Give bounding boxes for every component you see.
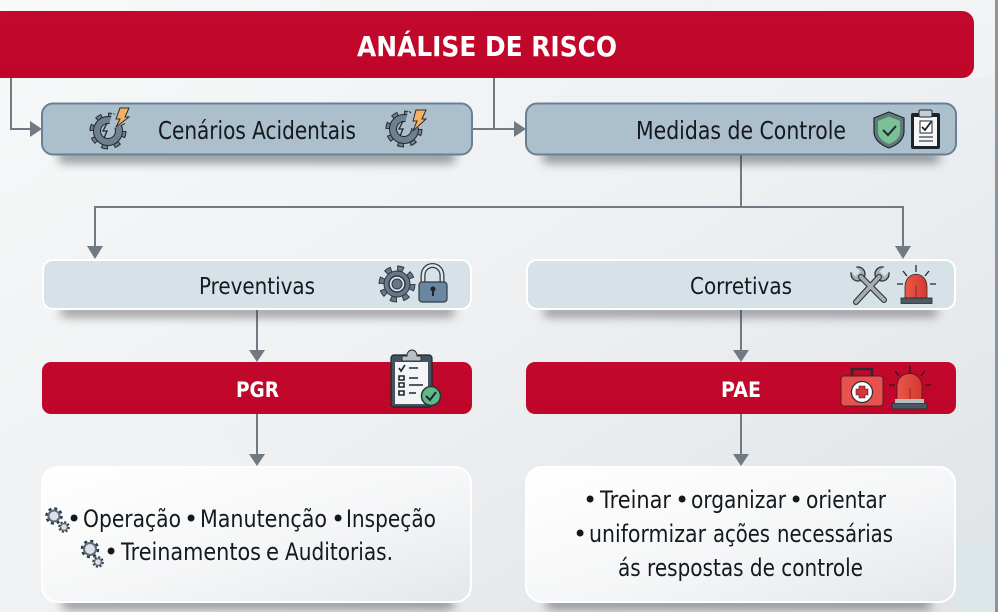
title banner	[0, 11, 974, 78]
icon: padlock	[419, 266, 447, 302]
text: PAE line one	[583, 486, 886, 514]
icon: broken gear with lightning	[92, 108, 129, 146]
title: ANÁLISE DE RISCO	[357, 29, 617, 63]
connector: PGR to list	[249, 414, 265, 466]
text: PGR line two	[104, 538, 393, 566]
panel: Corretivas: Corretivas	[690, 272, 792, 300]
text: PAE line two: necessárias	[777, 520, 893, 548]
panel: Cenários Acidentais: Cenários Acidentais	[158, 116, 356, 145]
panel: Preventivas	[43, 260, 471, 317]
text: PAE line one: orientar	[806, 486, 886, 514]
panel: PGR	[42, 350, 472, 414]
text: PAE line one: organizar	[691, 486, 786, 514]
text: PGR line one: Operação	[83, 505, 181, 533]
icon: gear	[382, 268, 412, 300]
connector: PAE to list	[733, 414, 749, 466]
text: PAE line two: •	[573, 520, 587, 548]
connector: Medidas de Controle to Preventivas and Corretivas	[87, 154, 911, 259]
panel: Medidas de Controle	[526, 104, 956, 163]
panel: Medidas de Controle: Medidas de Controle	[636, 116, 846, 145]
icon: shield with check	[874, 112, 904, 148]
icon: small gears	[47, 509, 68, 532]
connector: Corretivas to PAE	[733, 309, 749, 362]
connector: header to Cenários Acidentais	[11, 78, 42, 137]
icon: small gears	[82, 542, 102, 566]
text: PAE line two: ações	[713, 520, 770, 548]
text: PGR line two: e	[266, 538, 279, 566]
text: PAE line two: uniformizar	[589, 520, 706, 548]
text: PAE line one: •	[675, 486, 689, 514]
panel: PGR activities	[42, 467, 471, 609]
panel: Preventivas: Preventivas	[199, 272, 315, 300]
panel: Corretivas	[527, 260, 955, 317]
text: PAE line one: •	[789, 486, 803, 514]
text: PGR line one: •	[184, 505, 198, 533]
text: PGR line one: Manutenção	[200, 505, 327, 533]
icon: red siren	[897, 265, 936, 304]
panel: PAE: PAE	[721, 378, 761, 402]
text: PGR line one	[67, 505, 436, 533]
icon: red siren	[889, 366, 931, 409]
text: PAE line three: ás respostas de controle	[618, 554, 863, 582]
connector: Preventivas to PGR	[249, 309, 265, 362]
text: PGR line two: Auditorias.	[285, 538, 393, 566]
icon: crossed wrenches	[848, 264, 892, 302]
text: PGR line two: Treinamentos	[120, 538, 261, 566]
connector: header to Medidas de Controle	[472, 78, 526, 137]
icon: checklist clipboard	[391, 350, 440, 407]
panel: Cenários Acidentais	[42, 104, 472, 163]
text: PGR line one: •	[331, 505, 345, 533]
text: PGR line two: •	[104, 538, 118, 566]
text: PGR line one: •	[67, 505, 81, 533]
text: PGR line one: Inspeção	[346, 505, 436, 533]
text: PAE line one: Treinar	[599, 486, 671, 514]
text: PAE line two	[573, 520, 893, 548]
icon: broken gear with lightning	[388, 110, 426, 144]
icon: first aid kit	[841, 369, 883, 406]
panel: PGR: PGR	[236, 378, 279, 402]
text: PAE line one: •	[583, 486, 597, 514]
panel: PAE	[526, 362, 956, 414]
icon: clipboard with check	[911, 110, 940, 149]
panel: PAE activities	[526, 467, 955, 609]
